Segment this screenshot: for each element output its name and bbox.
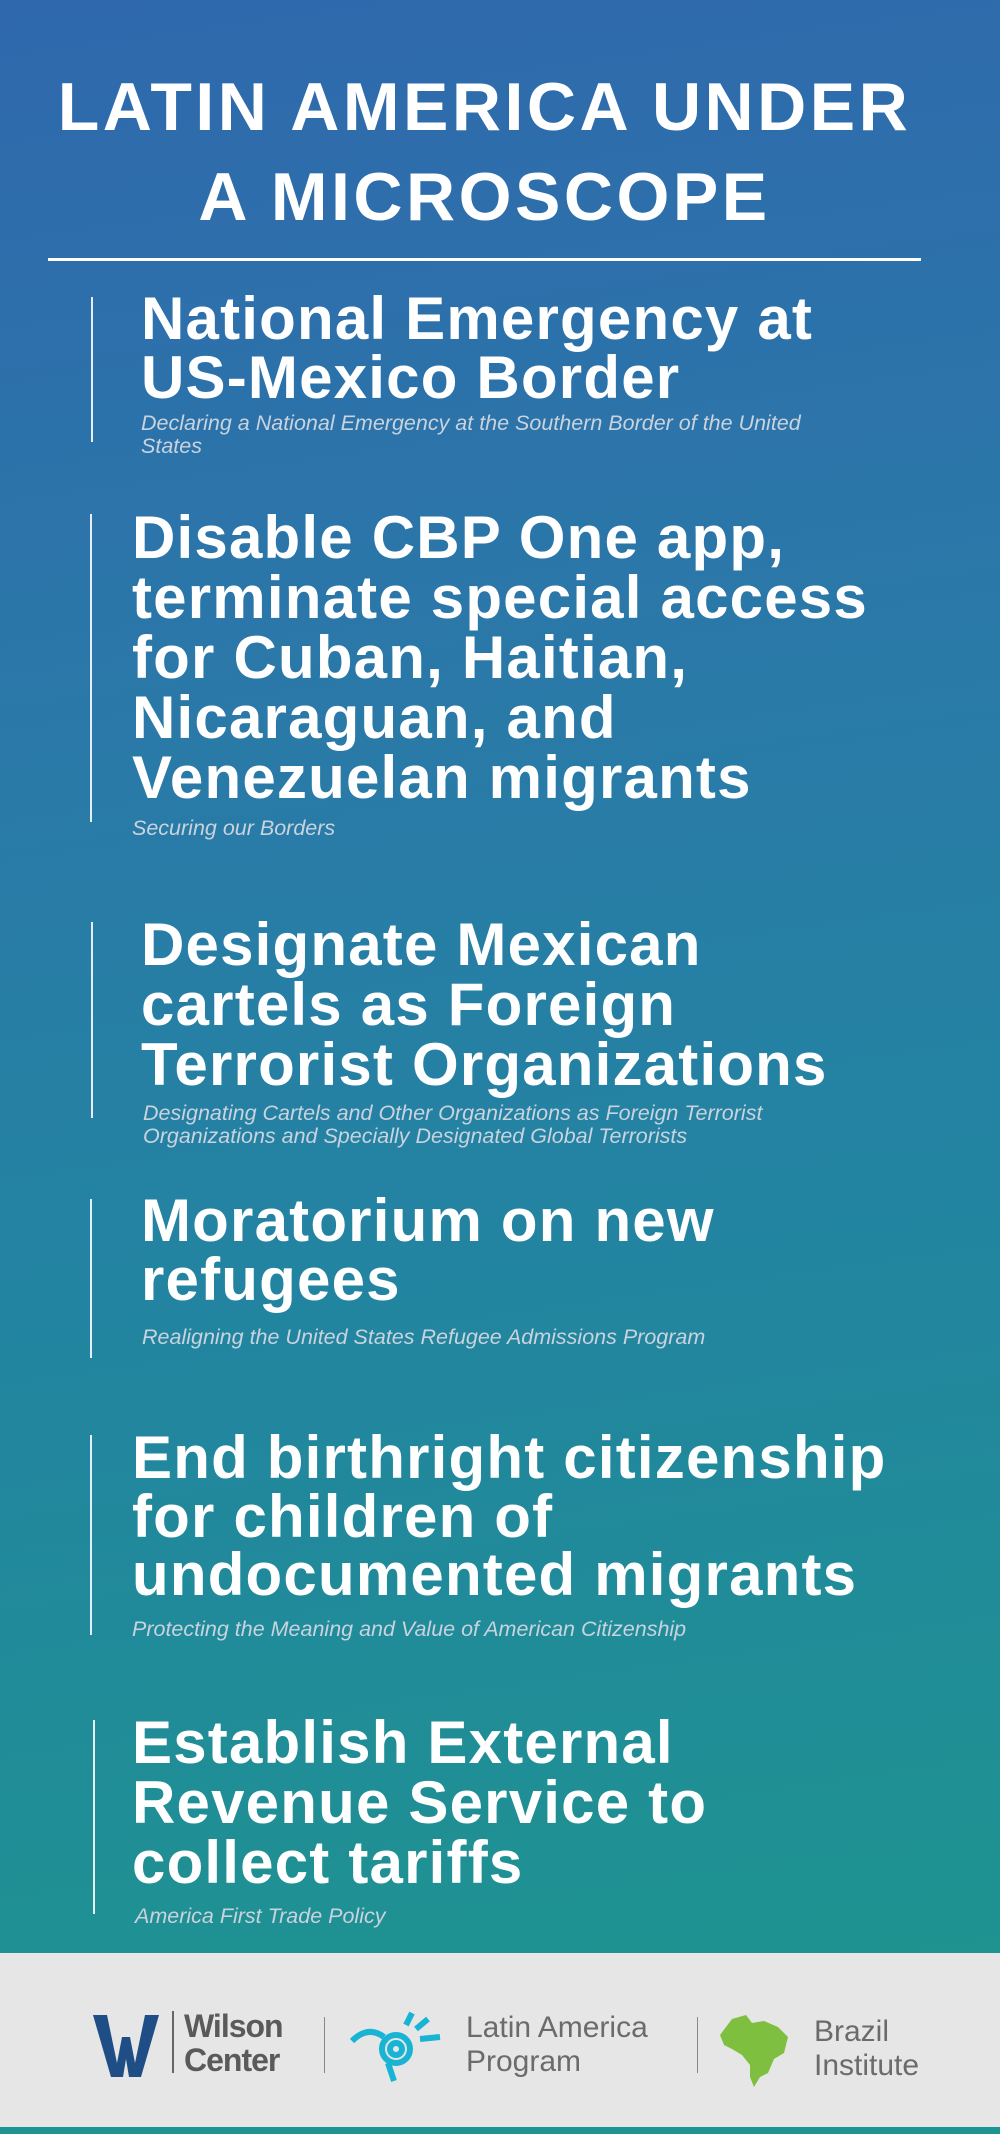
title: LATIN AMERICA UNDER [58, 69, 911, 145]
subtitle: America First Trade Policy [135, 1904, 385, 1928]
heading [132, 1709, 707, 1896]
heading: Venezuelan migrants [132, 744, 752, 811]
subtitle: Designating Cartels and Other Organizations as Foreign Terrorist [143, 1101, 762, 1125]
logo: Latin America Program: Latin America [466, 2011, 648, 2044]
item: refugees [90, 1187, 715, 1358]
heading: refugees [141, 1246, 401, 1312]
subtitle: Declaring a National Emergency at the Southern Border of the United [141, 411, 801, 435]
heading [141, 911, 828, 1098]
subtitle: Securing our Borders [132, 816, 335, 840]
heading [141, 1187, 715, 1313]
logo: Brazil Institute [720, 2015, 919, 2087]
subtitle: States [141, 434, 202, 458]
heading: for children of [132, 1482, 553, 1550]
subtitle: Protecting the Meaning and Value of American Citizenship [132, 1617, 686, 1641]
heading [132, 504, 868, 811]
logo: Brazil Institute: Brazil [814, 2015, 889, 2048]
heading: Revenue Service to [132, 1769, 707, 1836]
heading: cartels as Foreign [141, 971, 676, 1038]
subtitle [143, 1101, 764, 1148]
logo: Latin America Program: Program [466, 2045, 581, 2078]
subtitle: Organizations and Specially Designated Global Terrorists [143, 1124, 687, 1148]
icon: W [93, 2015, 159, 2077]
subtitle [141, 411, 802, 458]
heading: Establish External [132, 1709, 674, 1776]
title [58, 69, 911, 235]
heading: collect tariffs [132, 1829, 523, 1896]
logo: Wilson Center [93, 2008, 283, 2078]
heading: Terrorist Organizations [141, 1031, 828, 1098]
item: national emergency [91, 285, 813, 458]
title: A MICROSCOPE [198, 159, 771, 235]
heading: terminate special access [132, 564, 868, 631]
heading: Nicaraguan, and [132, 684, 617, 751]
logo: Latin America Program [350, 2011, 648, 2082]
item: birthright [90, 1424, 887, 1641]
footer [0, 1953, 1000, 2127]
logo: Wilson Center: Center [184, 2042, 279, 2078]
item: CBP One [90, 504, 868, 840]
icon: Brazil map [720, 2015, 788, 2087]
item: external revenue [93, 1709, 707, 1928]
heading: undocumented migrants [132, 1541, 857, 1608]
heading: Designate Mexican [141, 911, 702, 978]
item: cartels [91, 911, 828, 1148]
heading: End birthright citizenship [132, 1424, 887, 1491]
heading: Moratorium on new [141, 1187, 715, 1254]
heading: for Cuban, Haitian, [132, 624, 688, 691]
heading: National Emergency at [141, 285, 813, 352]
heading: US-Mexico Border [141, 344, 680, 410]
heading [141, 285, 813, 410]
icon: bird [350, 2012, 440, 2082]
subtitle: Realigning the United States Refugee Admissions Program [142, 1325, 705, 1349]
logo: Brazil Institute: Institute [814, 2049, 919, 2082]
heading: Disable CBP One app, [132, 504, 785, 571]
heading [132, 1424, 887, 1608]
logo: Wilson Center: Wilson [184, 2008, 283, 2044]
